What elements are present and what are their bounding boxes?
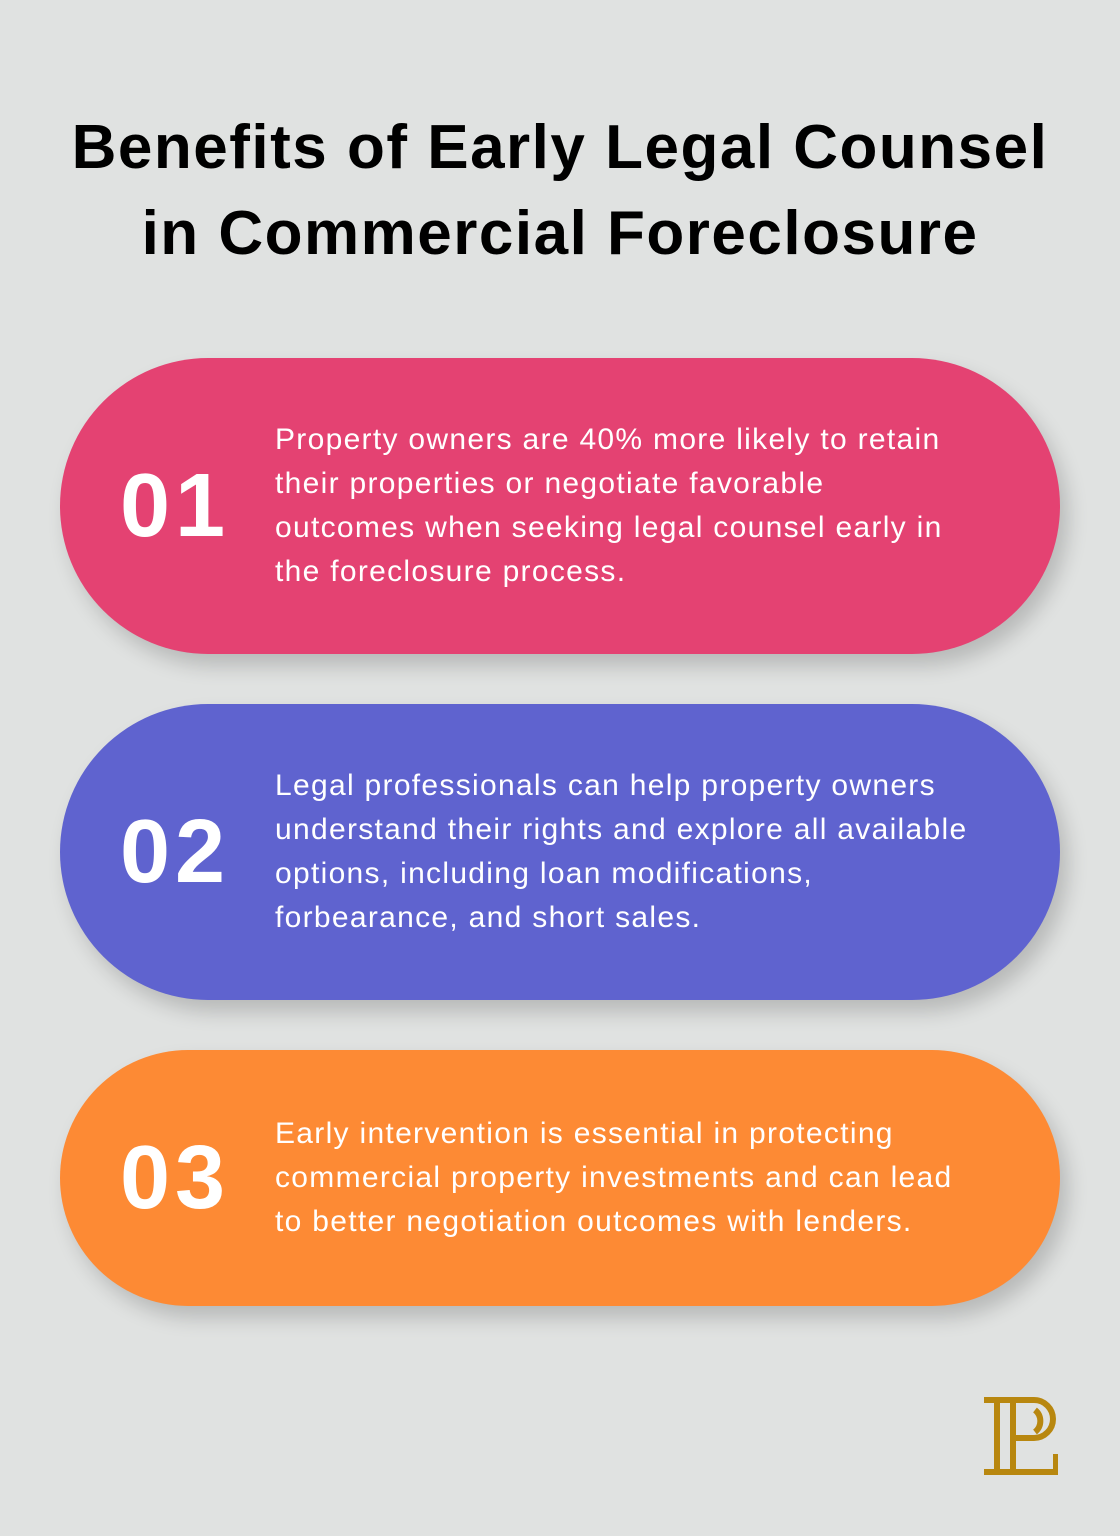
title: in Commercial Foreclosure [142, 199, 978, 268]
text 02: forbearance, and short sales. [275, 901, 701, 934]
text 03: Early intervention is essential in protecting [275, 1117, 894, 1150]
panel: benefit 01 [60, 358, 1060, 654]
text 03 [275, 1117, 952, 1238]
text 01: the foreclosure process. [275, 555, 626, 588]
number 03: 03 [120, 1128, 230, 1228]
number 02: 02 [120, 802, 230, 902]
text 03: commercial property investments and can lead [275, 1161, 952, 1194]
text 01: outcomes when seeking legal counsel early in [275, 511, 943, 544]
number 01: 01 [120, 456, 230, 556]
text 02: options, including loan modifications, [275, 857, 813, 890]
title: Benefits of Early Legal Counsel [72, 113, 1048, 182]
panel: benefit 03 [60, 1050, 1060, 1306]
text 01: their properties or negotiate favorable [275, 467, 824, 500]
text 01 [275, 423, 943, 588]
text 02 [275, 769, 967, 934]
text 03: to better negotiation outcomes with lenders. [275, 1205, 913, 1238]
text 01: Property owners are 40% more likely to retain [275, 423, 940, 456]
icon: logo [984, 1397, 1058, 1475]
panel: benefit 02 [60, 704, 1060, 1000]
text 02: Legal professionals can help property owners [275, 769, 936, 802]
title [72, 113, 1048, 268]
text 02: understand their rights and explore all available [275, 813, 967, 846]
